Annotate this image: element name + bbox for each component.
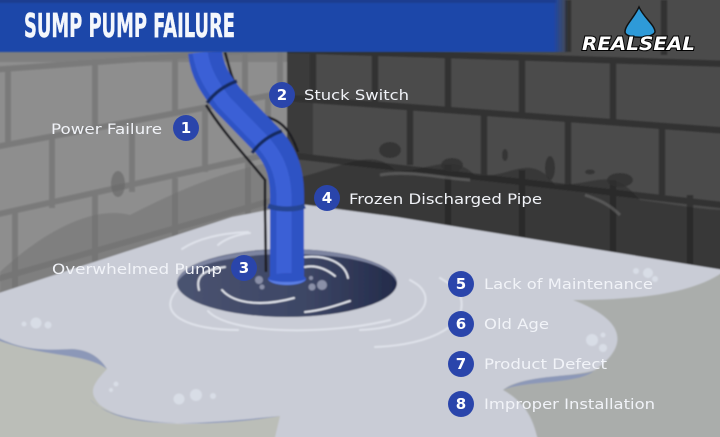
icon: water drop — [625, 7, 655, 37]
callout 6: Old Age: 6 — [456, 315, 466, 333]
logo: RealSeal: REALSEAL — [582, 33, 695, 55]
callout 1: Power Failure — [51, 115, 199, 141]
pipe with cable — [200, 52, 306, 285]
header banner — [0, 0, 568, 52]
callout 1: Power Failure: Power Failure — [51, 122, 162, 138]
callout 5: Lack of Maintenance — [448, 271, 653, 297]
title: SUMP PUMP FAILURE — [24, 6, 235, 45]
callout 2: Stuck Switch: 2 — [277, 86, 287, 104]
dry floor: left — [0, 333, 280, 437]
callout 4: Frozen Discharged Pipe: Frozen Discharged Pipe — [349, 192, 542, 208]
callout 2: Stuck Switch: Stuck Switch — [304, 88, 409, 104]
logo: RealSeal — [582, 7, 695, 55]
callout 8: Improper Installation: 8 — [456, 395, 466, 413]
dry floor: right — [503, 266, 720, 437]
callout 4: Frozen Discharged Pipe — [314, 185, 542, 211]
callout 6: Old Age: Old Age — [484, 317, 549, 333]
callout 2: Stuck Switch — [269, 82, 409, 108]
panel: right brick wall — [287, 0, 720, 280]
panel: left brick wall — [0, 0, 288, 310]
callout 1: Power Failure: 1 — [181, 119, 191, 137]
callout 3: Overwhelmed Pump: Overwhelmed Pump — [52, 262, 222, 278]
callout 7: Product Defect: 7 — [456, 355, 466, 373]
callout 3: Overwhelmed Pump — [52, 255, 257, 281]
callout 8: Improper Installation: Improper Installation — [484, 397, 655, 413]
callout 5: Lack of Maintenance: 5 — [456, 275, 466, 293]
callout 3: Overwhelmed Pump: 3 — [239, 259, 249, 277]
sump pit — [170, 232, 462, 347]
callout 5: Lack of Maintenance: Lack of Maintenance — [484, 277, 653, 293]
callout 7: Product Defect: Product Defect — [484, 357, 607, 373]
callout 6: Old Age — [448, 311, 549, 337]
callout 8: Improper Installation — [448, 391, 655, 417]
panel: concrete floor — [0, 204, 720, 437]
callout 7: Product Defect — [448, 351, 607, 377]
callout 4: Frozen Discharged Pipe: 4 — [322, 189, 332, 207]
